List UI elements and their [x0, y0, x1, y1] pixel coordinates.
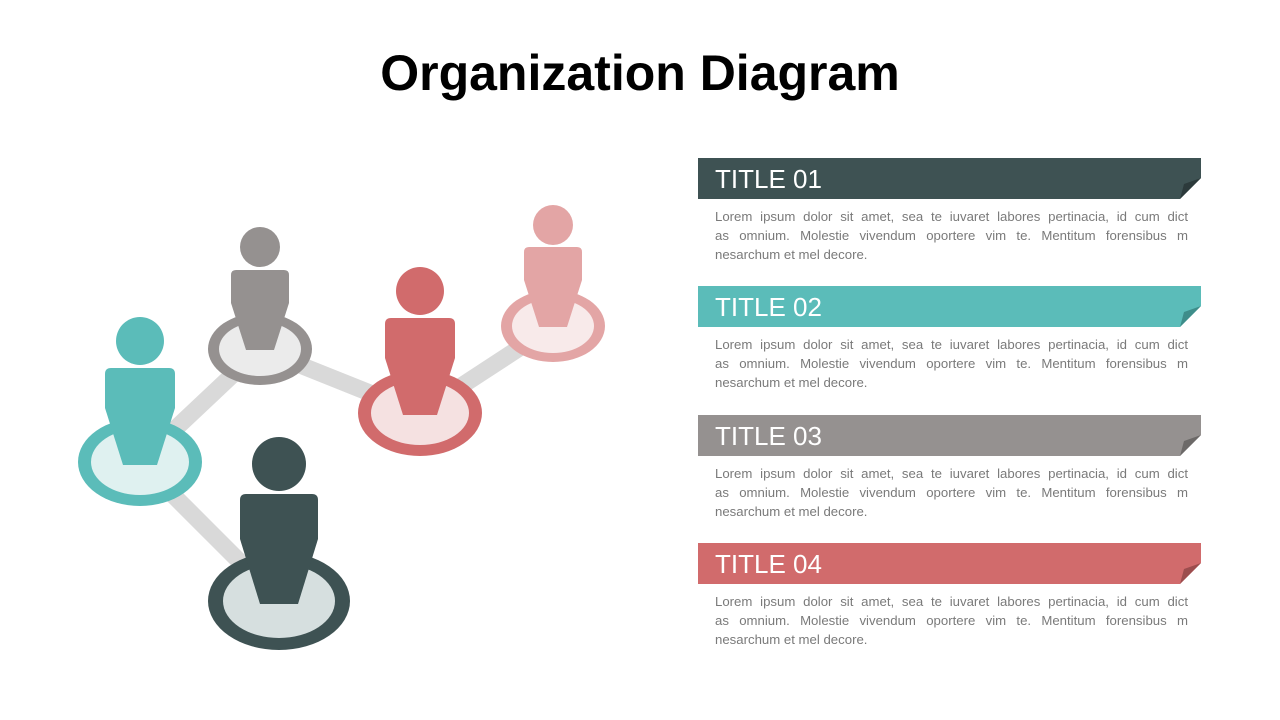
title: Organization Diagram — [380, 45, 900, 101]
panel: title 04 — [698, 543, 1201, 647]
text 03: nesarchum et mel decore. — [715, 504, 867, 519]
panel: title 02 — [698, 286, 1201, 390]
connector lines — [140, 326, 553, 601]
banner 02: TITLE 02 — [715, 292, 822, 322]
person: pink — [501, 205, 605, 362]
text 02: as omnium. Molestie vivendum oportere vim te. Mentitum forensibus m — [715, 356, 1188, 371]
text 02 — [715, 337, 1188, 390]
panel: title 03 — [698, 415, 1201, 519]
diagram: people network — [78, 205, 605, 650]
text 01: nesarchum et mel decore. — [715, 247, 867, 262]
text 04 — [715, 594, 1188, 647]
banner 01 — [698, 158, 1201, 199]
banner 03 — [698, 415, 1201, 456]
banner 01: TITLE 01 — [715, 164, 822, 194]
banner 04: TITLE 04 — [715, 549, 822, 579]
text 02: Lorem ipsum dolor sit amet, sea te iuvaret labores pertinacia, id cum dict — [715, 337, 1188, 352]
person: gray — [208, 227, 312, 385]
text 01: Lorem ipsum dolor sit amet, sea te iuvaret labores pertinacia, id cum dict — [715, 209, 1188, 224]
panel: title 01 — [698, 158, 1201, 262]
text 03: as omnium. Molestie vivendum oportere vim te. Mentitum forensibus m — [715, 485, 1188, 500]
banner 02 — [698, 286, 1201, 327]
person: teal — [78, 317, 202, 506]
text 02: nesarchum et mel decore. — [715, 375, 867, 390]
person: dark — [208, 437, 350, 650]
text 03 — [715, 466, 1188, 519]
text 04: Lorem ipsum dolor sit amet, sea te iuvaret labores pertinacia, id cum dict — [715, 594, 1188, 609]
banner 03: TITLE 03 — [715, 421, 822, 451]
text 01 — [715, 209, 1188, 262]
text 04: as omnium. Molestie vivendum oportere vim te. Mentitum forensibus m — [715, 613, 1188, 628]
text 01: as omnium. Molestie vivendum oportere vim te. Mentitum forensibus m — [715, 228, 1188, 243]
text 04: nesarchum et mel decore. — [715, 632, 867, 647]
person: red — [358, 267, 482, 456]
banner 04 — [698, 543, 1201, 584]
text 03: Lorem ipsum dolor sit amet, sea te iuvaret labores pertinacia, id cum dict — [715, 466, 1188, 481]
